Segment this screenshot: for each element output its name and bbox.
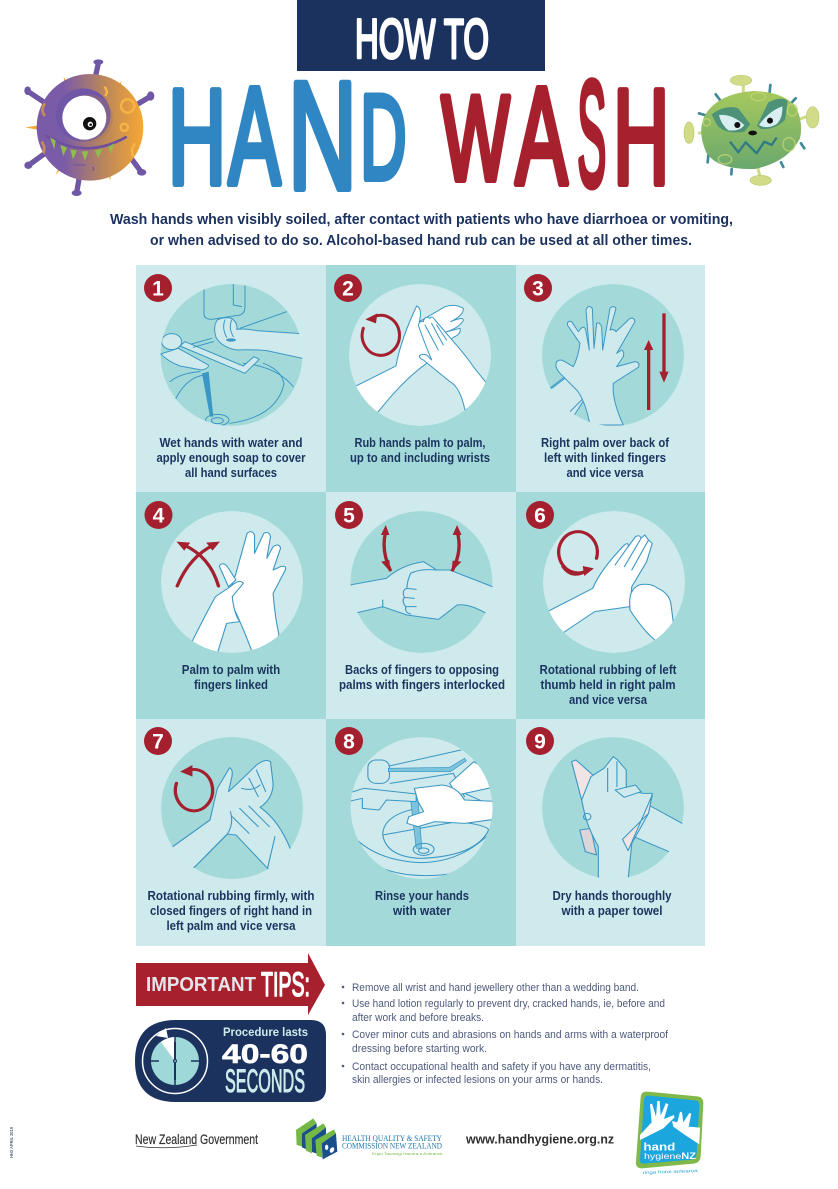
badge: 1 [144, 274, 172, 302]
panel: step 6 [516, 492, 705, 719]
logo: Health Quality and Safety Commission: HEALTH QUALITY & SAFETY [342, 1133, 442, 1143]
logo: hand hygiene NZ [636, 1092, 703, 1175]
illustration: palm to palm [349, 284, 491, 426]
tips list: after work and before breaks. [352, 1012, 484, 1024]
intro text: or when advised to do so. Alcohol-based hand rub can be used at all other times. [150, 232, 692, 249]
logo: Health Quality and Safety Commission: COMMISSION NEW ZEALAND [342, 1140, 442, 1150]
timer panel: procedure duration: Procedure lasts [223, 1025, 308, 1039]
badge: 3: 3 [532, 278, 544, 300]
illustration: interlocked fingers [350, 511, 492, 653]
badge: 4: 4 [153, 504, 165, 528]
arrow banner: important tips: IMPORTANT [146, 974, 256, 996]
caption: step 9: with a paper towel [561, 904, 662, 918]
badge: 7: 7 [152, 730, 164, 754]
tips list: skin allergies or infected lesions on your arms or hands. [352, 1074, 603, 1086]
badge: 5 [335, 501, 363, 529]
caption: step 6 [540, 663, 677, 707]
tips list: dressing before starting work. [352, 1043, 487, 1055]
caption: step 5: Backs of fingers to opposing [345, 663, 499, 677]
tips list: Remove all wrist and hand jewellery other than a wedding band. [352, 982, 639, 994]
caption: step 1: all hand surfaces [185, 466, 277, 480]
caption: step 3: left with linked fingers [544, 451, 666, 465]
badge: 2: 2 [342, 278, 354, 300]
panel: step 5 [326, 492, 516, 719]
badge: 6 [526, 501, 554, 529]
arrow banner: important tips: TIPS: [261, 966, 310, 1004]
badge: 9 [526, 727, 554, 755]
caption: step 8: with water [392, 904, 451, 918]
caption: step 7: Rotational rubbing firmly, with [148, 889, 314, 903]
title: hand wash [168, 50, 669, 222]
icon: stopwatch [142, 1028, 208, 1094]
icon: purple one-eyed virus [24, 59, 154, 196]
badge: 1: 1 [152, 278, 164, 300]
caption: step 7: left palm and vice versa [166, 919, 296, 933]
illustration: fingers linked [161, 511, 303, 653]
title: hand wash: H [168, 62, 226, 212]
panel: step 7 [136, 719, 326, 946]
caption: step 1: apply enough soap to cover [156, 451, 306, 465]
caption: step 5 [339, 663, 505, 692]
illustration: fingertips in palm [161, 737, 303, 879]
panel: step 9 [516, 719, 705, 946]
logo: Health Quality and Safety Commission [296, 1118, 443, 1159]
caption: step 6: and vice versa [569, 693, 648, 707]
timer panel: procedure duration: SECONDS [225, 1063, 305, 1099]
print code: HH3 APRIL 2019 [9, 1127, 14, 1158]
badge: 4 [144, 501, 172, 529]
caption: step 8 [375, 889, 469, 918]
caption: step 9: Dry hands thoroughly [552, 889, 672, 903]
badge: 5: 5 [343, 504, 355, 528]
icon: green angry virus [684, 75, 819, 185]
illustration: palm over back of hand [540, 284, 684, 426]
caption: step 2: Rub hands palm to palm, [354, 436, 486, 450]
tips list: Contact occupational health and safety if you have any dermatitis, [352, 1061, 651, 1073]
title banner: how to [297, 0, 545, 71]
caption: step 6: thumb held in right palm [540, 678, 676, 692]
title: hand wash: D [360, 70, 406, 204]
badge: 6: 6 [534, 504, 546, 528]
logo: hand hygiene NZ: ringa horoi aotearoa [643, 1168, 699, 1175]
tips list [342, 982, 669, 1086]
logo: New Zealand Government: New Zealand Government [135, 1131, 258, 1147]
title: hand wash: H [613, 62, 669, 212]
title: hand wash: W [442, 72, 510, 206]
caption: step 6: Rotational rubbing of left [540, 663, 677, 677]
logo: hand hygiene NZ: hand [643, 1142, 675, 1154]
caption: step 3: and vice versa [566, 466, 644, 480]
title: hand wash: A [516, 60, 568, 214]
caption: step 5: palms with fingers interlocked [339, 678, 505, 692]
logo: hand hygiene NZ: hygiene [644, 1152, 682, 1161]
website url: www.handhygiene.org.nz [465, 1132, 614, 1146]
caption: step 1: Wet hands with water and [160, 436, 302, 450]
caption: step 7 [148, 889, 314, 933]
title: hand wash: N [288, 50, 357, 222]
title: hand wash: A [228, 60, 280, 214]
intro text [110, 211, 733, 249]
illustration: tap and soap dispenser [160, 283, 307, 426]
timer panel: procedure duration: 40-60 [222, 1039, 308, 1069]
panel: step 1 [136, 265, 326, 492]
title banner: how to: HOW TO [355, 7, 489, 70]
badge: 8 [335, 727, 363, 755]
title: hand wash: S [577, 50, 606, 218]
tips list: Cover minor cuts and abrasions on hands and arms with a waterproof [352, 1029, 669, 1041]
caption: step 8: Rinse your hands [375, 889, 469, 903]
panel: step 3 [516, 265, 705, 492]
caption: step 4 [182, 663, 280, 692]
badge: 8: 8 [343, 730, 355, 754]
caption: step 3: Right palm over back of [541, 436, 670, 450]
timer panel: procedure duration [135, 1020, 326, 1102]
badge: 2 [334, 274, 362, 302]
panel: step 2 [326, 265, 516, 492]
caption: step 7: closed fingers of right hand in [150, 904, 312, 918]
badge: 7 [144, 727, 172, 755]
panel: step 4 [136, 492, 326, 719]
badge: 3 [524, 274, 552, 302]
caption: step 3 [541, 436, 670, 480]
caption: step 1 [156, 436, 306, 480]
caption: step 2: up to and including wrists [350, 451, 490, 465]
illustration: rotational thumb rub [539, 511, 685, 653]
logo: hand hygiene NZ: NZ [681, 1151, 696, 1161]
caption: step 4: fingers linked [194, 678, 268, 692]
caption: step 2 [350, 436, 490, 465]
illustration: dry with paper towel [542, 737, 691, 880]
panel: step 8 [326, 719, 516, 946]
intro text: Wash hands when visibly soiled, after contact with patients who have diarrhoea or vomiting, [110, 211, 733, 228]
logo: Health Quality and Safety Commission: Kupu Taurangi Hauora o Aotearoa [372, 1151, 443, 1156]
tips list: Use hand lotion regularly to prevent dry, cracked hands, ie, before and [352, 998, 665, 1010]
caption: step 4: Palm to palm with [182, 663, 280, 677]
arrow banner: important tips [136, 953, 325, 1015]
caption: step 9 [552, 889, 672, 918]
illustration: rinse under tap [347, 737, 502, 879]
badge: 9: 9 [534, 730, 546, 754]
